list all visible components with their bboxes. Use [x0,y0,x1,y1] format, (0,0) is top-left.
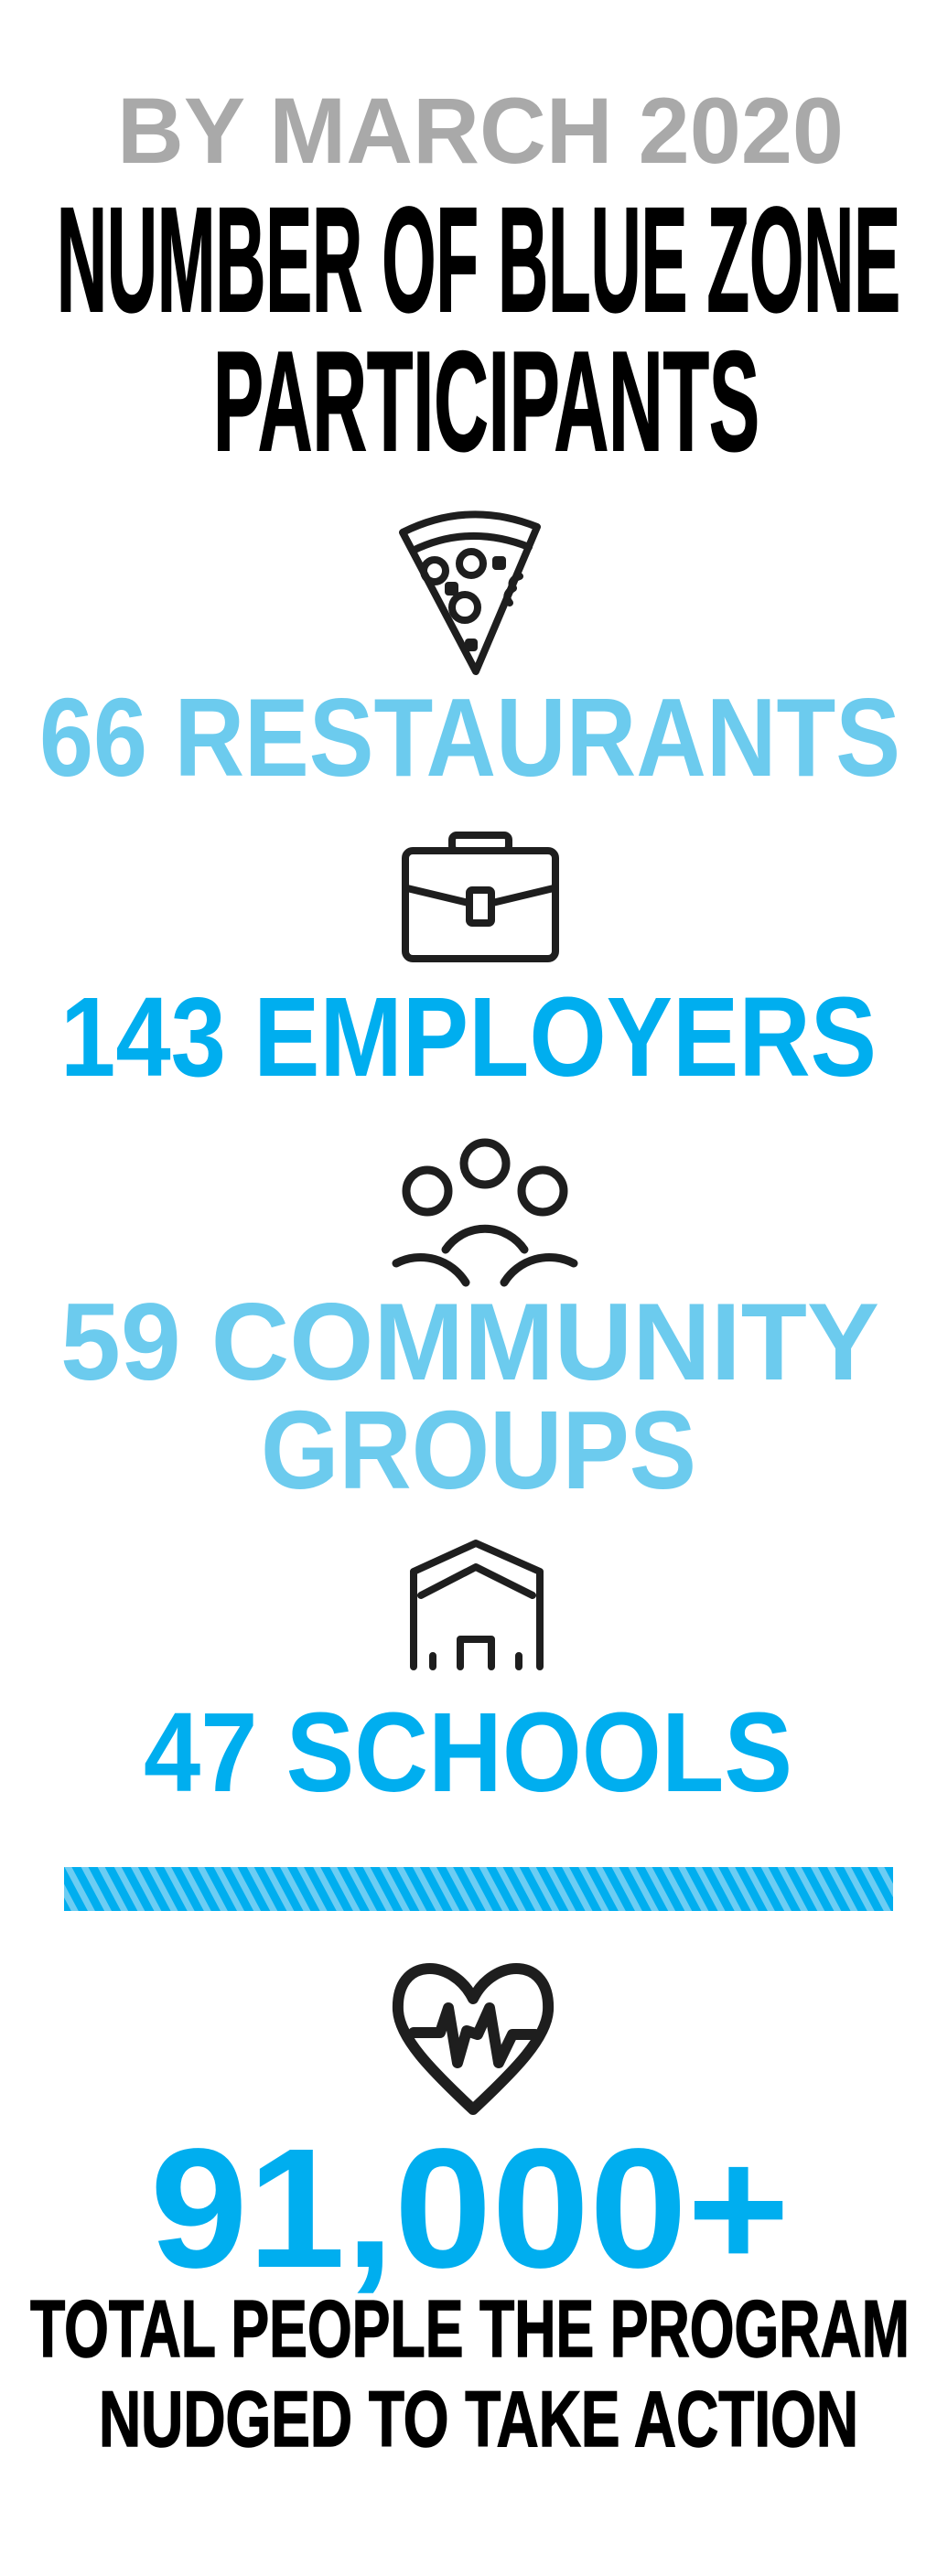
stat: community groups: 59 COMMUNITY [60,1281,879,1403]
icon: heart with pulse [398,1969,548,2109]
icon: briefcase [405,835,555,959]
stat: community groups [60,1281,879,1512]
icon: pizza slice [403,514,537,671]
caption [30,2283,910,2463]
stat: schools: 47 SCHOOLS [144,1690,792,1816]
icon: people group [396,1143,574,1283]
subtitle: by march 2020: BY MARCH 2020 [117,79,844,183]
big number: 91,000+: 91,000+ [150,2114,790,2303]
stat: community groups: GROUPS [261,1388,696,1512]
striped divider bar [64,1867,893,1911]
icon: school [414,1543,540,1667]
title [57,176,900,480]
